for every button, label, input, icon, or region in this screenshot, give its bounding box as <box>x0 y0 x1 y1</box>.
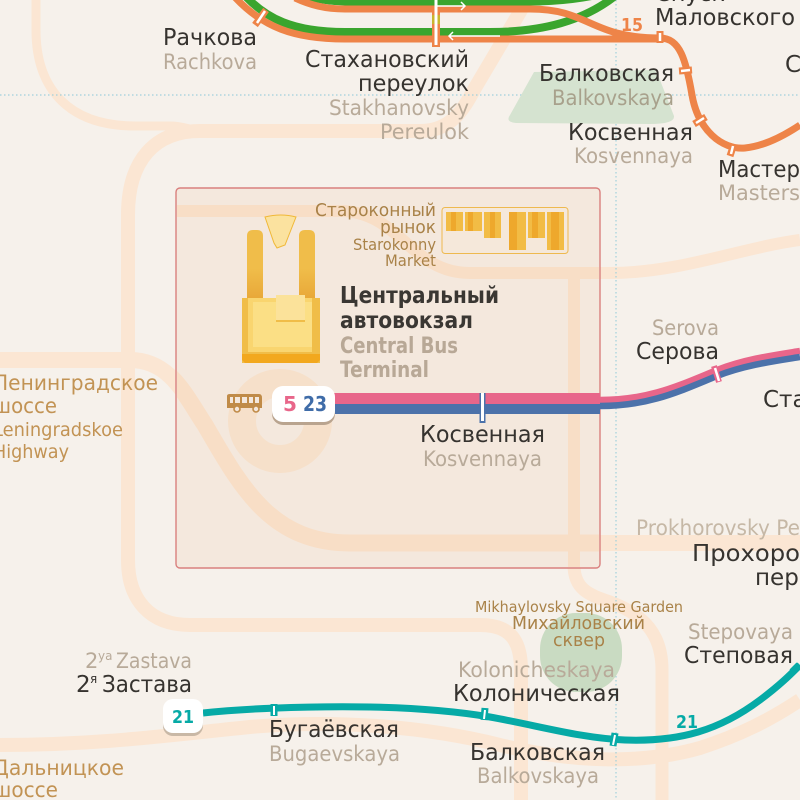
label: Balkovskaya south <box>470 740 605 788</box>
panel: central bus terminal area <box>176 188 600 568</box>
label: 2nd Zastava <box>76 649 192 698</box>
label: Mikhaylovsky Square Garden: Михайловский <box>512 613 645 634</box>
label: Stepovaya: Stepovaya <box>688 620 793 644</box>
chart: Starokonny Market bars <box>442 208 568 254</box>
direction arrows <box>437 2 500 40</box>
label: Serova: Серова <box>636 339 719 365</box>
label: Kolonicheskaya <box>453 658 620 707</box>
station ticks: top lines <box>255 10 734 156</box>
label: Serova: Serova <box>652 316 719 340</box>
heading: Central Bus Terminal: Central Bus <box>340 334 458 359</box>
badge: routes 5 and 23: 23 <box>303 392 327 416</box>
label: Kolonicheskaya: Колоническая <box>453 681 620 707</box>
heading: Central Bus Terminal <box>340 283 499 383</box>
label: Starokonny Market: Market <box>385 251 436 270</box>
label: Stakhanovsky Pereulok <box>305 47 470 144</box>
label: Kosvennaya in terminal: Kosvennaya <box>423 447 542 471</box>
pink and blue line to the east <box>600 351 800 406</box>
label: Stepovaya: Степовая <box>684 643 793 669</box>
bus loop road <box>242 383 318 459</box>
badge: routes 5 and 23: 5 <box>283 392 297 416</box>
park: Balkovskaya <box>508 70 674 124</box>
icon: central bus terminal building <box>242 215 320 363</box>
label: Starokonny Market <box>315 200 436 270</box>
label: Leningradskoe Highway <box>0 371 158 463</box>
badge: routes 5 and 23 <box>272 386 335 425</box>
line number 15: 15 <box>621 15 643 36</box>
label: Kosvennaya in terminal: Косвенная <box>420 422 545 448</box>
station tick: Serova <box>714 366 719 382</box>
label: Kosvennaya north: Kosvennaya <box>574 144 693 168</box>
line number 21: 21 <box>676 712 698 733</box>
heading: Central Bus Terminal: Центральный <box>340 283 499 309</box>
label: 2nd Zastava: ya <box>98 649 112 663</box>
heading: Central Bus Terminal: Terminal <box>340 358 429 383</box>
label: Rachkova: Rachkova <box>163 50 257 74</box>
label: Balkovskaya south: Балковская <box>470 740 605 766</box>
label: 2nd Zastava: я <box>90 672 97 686</box>
label: 2nd Zastava: Застава <box>102 672 192 698</box>
badge: route 21 <box>163 699 203 736</box>
badge: route 21: 21 <box>172 707 194 728</box>
interchange at Stakhanovsky Pereulok <box>432 0 440 47</box>
label: Starokonny Market: Starokonny <box>353 235 436 254</box>
label: Bugaevskaya <box>269 717 400 766</box>
label: Prokhorovsky <box>636 516 800 591</box>
label: Mikhaylovsky Square Garden: сквер <box>553 630 605 651</box>
label: Rachkova: Рачкова <box>163 25 257 51</box>
label: Bugaevskaya: Бугаёвская <box>269 717 399 743</box>
label: Serova <box>636 316 719 365</box>
label: Kosvennaya north: Косвенная <box>568 120 693 146</box>
label: Mikhaylovsky Square Garden: Mikhaylovsky Square Garden <box>475 598 683 616</box>
label: 2nd Zastava: 2 <box>76 672 91 698</box>
label: Kosvennaya in terminal <box>420 422 545 471</box>
heading: Central Bus Terminal: автовокзал <box>340 308 473 334</box>
icon: bus <box>227 394 262 412</box>
metro lines green and orange at top <box>232 0 800 148</box>
label: Stakhanovsky Pereulok: переулок <box>358 71 469 97</box>
label: Balkovskaya south: Balkovskaya <box>477 764 599 788</box>
roads inside terminal panel <box>177 205 599 567</box>
label: Stakhanovsky Pereulok: Stakhanovsky <box>329 96 469 120</box>
label: Starokonny Market: рынок <box>380 217 436 238</box>
label: Kolonicheskaya: Kolonicheskaya <box>458 658 615 682</box>
label: Balkovskaya north: Балковская <box>539 61 674 87</box>
metro line 21 <box>203 665 800 740</box>
station ticks: line 21 <box>274 665 799 746</box>
label: Stakhanovsky Pereulok: Pereulok <box>380 120 470 144</box>
label: Masters: Masters <box>718 181 800 205</box>
label: 2nd Zastava: Zastava <box>116 649 192 673</box>
label: Starokonny Market: Староконный <box>315 200 436 221</box>
label: Kosvennaya north <box>568 120 693 168</box>
pink and blue line in terminal <box>330 393 600 423</box>
park: Mikhaylovsky Square Garden <box>540 613 622 692</box>
label: Stepovaya <box>684 620 793 669</box>
label: Masters <box>718 157 800 205</box>
label: Spusk Malovskogo: Маловского <box>655 5 795 31</box>
label: Bugaevskaya: Bugaevskaya <box>269 742 400 766</box>
label: Dalnitskoe Highway <box>0 756 124 800</box>
label: Stakhanovsky Pereulok: Стахановский <box>305 47 469 73</box>
label: Prokhorovsky: Прохоро <box>692 541 800 567</box>
label: Balkovskaya north: Balkovskaya <box>552 86 674 110</box>
label: Rachkova <box>163 25 257 74</box>
label: 2nd Zastava: 2 <box>85 649 98 673</box>
label: Mikhaylovsky Square Garden <box>475 598 683 651</box>
label: Balkovskaya north <box>539 61 674 110</box>
